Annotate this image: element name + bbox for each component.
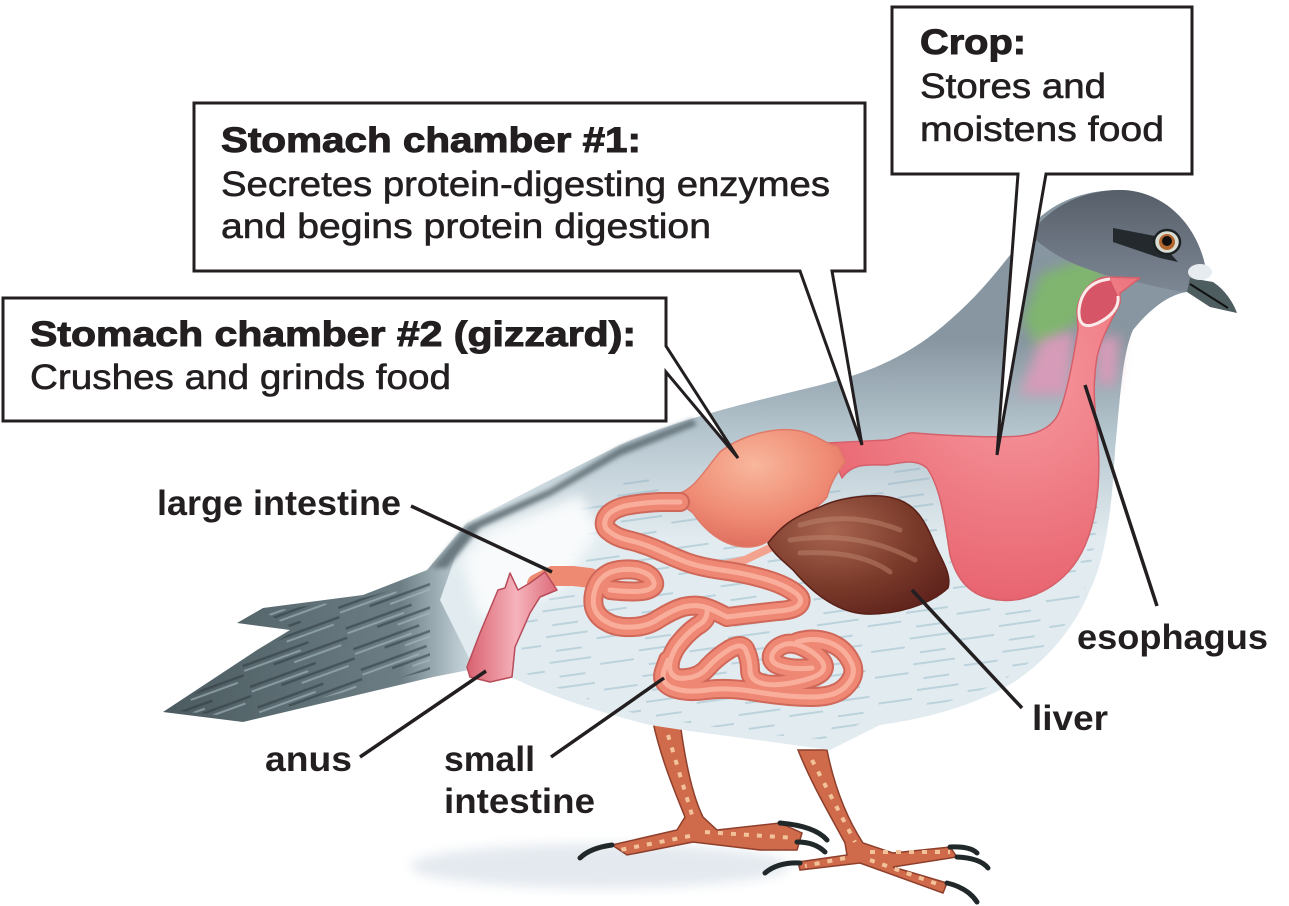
small intestine (593, 502, 853, 697)
label: small intestine: small (444, 740, 535, 779)
label: esophagus (1077, 385, 1268, 657)
label: large intestine: large intestine (157, 484, 401, 523)
right leg (798, 750, 957, 893)
esophagus opening highlight (1079, 279, 1118, 326)
stomach chamber 1 text: Secretes protein-digesting enzymes (221, 165, 830, 204)
ground shadow (410, 844, 790, 888)
illustration: pigeon (163, 190, 1237, 902)
esophagus and crop (827, 277, 1140, 600)
stomach chamber 2 title: Stomach chamber #2 (gizzard): (30, 315, 636, 354)
leg scales (620, 735, 950, 885)
digestive organs (467, 277, 1140, 697)
upper back edge (432, 419, 697, 568)
gizzard (680, 430, 845, 547)
liver (768, 496, 949, 614)
pigeon tail (163, 505, 520, 722)
neck plumage: pink (1020, 330, 1120, 395)
pale rump feathers (462, 495, 600, 620)
eye stripe (1113, 228, 1178, 262)
pigeon legs and feet (580, 722, 988, 902)
pigeon head (1030, 190, 1205, 292)
label: liver: liver (1032, 699, 1108, 738)
pigeon body (440, 190, 1205, 750)
cere (1188, 264, 1212, 280)
eye (1154, 230, 1180, 254)
label: anus (265, 671, 486, 779)
claws (580, 823, 988, 902)
callout: stomach chamber 1: and begins protein digestion (221, 207, 711, 246)
duct to liver (713, 548, 770, 567)
left leg (612, 722, 802, 855)
anus (467, 572, 557, 682)
body feather streaks (520, 430, 1100, 740)
crop title: Crop: (920, 23, 1026, 62)
label: anus: anus (265, 740, 352, 779)
callout: stomach chamber 2 (3, 298, 738, 458)
crop text: Stores and (920, 67, 1106, 106)
stomach chamber 1 title: Stomach chamber #1: (221, 121, 641, 160)
label: small intestine: intestine (444, 782, 595, 821)
label: esophagus: esophagus (1077, 618, 1268, 657)
beak (1187, 278, 1237, 313)
neck plumage: green (1023, 252, 1103, 350)
large intestine (537, 576, 590, 584)
callout: stomach chamber 1 (194, 103, 865, 445)
label: small intestine (444, 678, 664, 821)
callout: crop (892, 7, 1192, 455)
label: large intestine (157, 484, 552, 572)
stomach chamber 2 text: Crushes and grinds food (30, 358, 451, 397)
label: liver (912, 590, 1108, 738)
callout: crop: moistens food (920, 110, 1164, 149)
